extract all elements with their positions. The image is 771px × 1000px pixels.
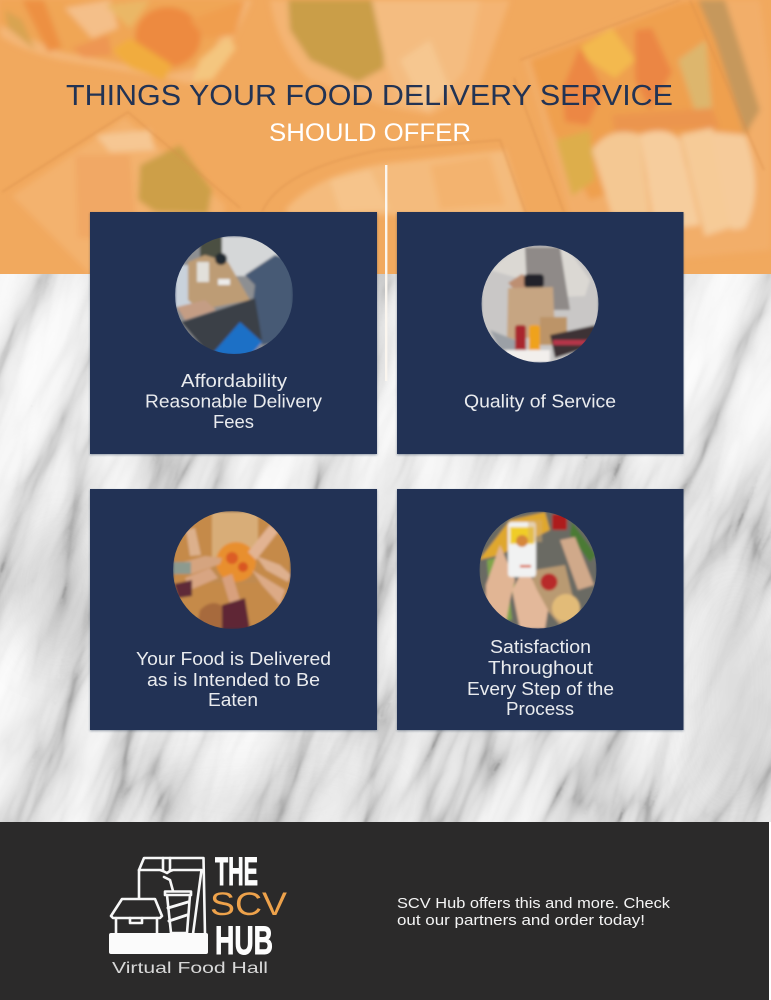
- card text: Affordability: [181, 371, 287, 391]
- panel: affordability card: [90, 212, 377, 454]
- photo: courier handing over paper bag: [175, 236, 293, 356]
- wordmark: Hub: HUB: [215, 919, 273, 963]
- card text: [145, 371, 322, 432]
- panel: footer: [0, 822, 769, 1000]
- panel: quality of service card: [397, 212, 684, 454]
- panel: satisfaction card: [397, 489, 684, 730]
- logo: The SCV Hub Virtual Food Hall: [109, 850, 288, 977]
- footer message: out our partners and order today!: [397, 912, 645, 929]
- tagline: Virtual Food Hall: [112, 960, 268, 977]
- photo: person packing paper bag: [481, 245, 599, 363]
- card text: as is Intended to Be: [147, 670, 320, 690]
- wordmark: SCV: SCV: [210, 886, 288, 922]
- footer message: SCV Hub offers this and more. Check: [397, 895, 671, 912]
- card text: Process: [506, 699, 574, 719]
- card text: Your Food is Delivered: [136, 649, 331, 669]
- photo: ordering food on a phone: [479, 511, 597, 629]
- card text: [467, 637, 614, 719]
- subtitle: SHOULD OFFER: [269, 119, 471, 147]
- icon: tray base: [109, 933, 208, 954]
- wordmark: The: THE: [215, 850, 258, 894]
- title: THINGS YOUR FOOD DELIVERY SERVICE: [66, 80, 673, 112]
- icon: takeout bag, box and cup: [111, 858, 205, 934]
- card text: Every Step of the: [467, 679, 614, 699]
- footer message: [397, 895, 671, 929]
- card text: Satisfaction: [490, 637, 591, 657]
- card text: Fees: [213, 412, 254, 432]
- photo: friends sharing pizza: [173, 511, 291, 629]
- card text: Quality of Service: [464, 392, 616, 412]
- card text: Throughout: [488, 658, 593, 678]
- panel: food delivered as intended card: [90, 489, 377, 730]
- panel: marble background: [0, 240, 771, 822]
- card text: [136, 649, 331, 710]
- panel: orange food photo header background: [0, 0, 771, 274]
- card text: Eaten: [208, 690, 258, 710]
- card text: Reasonable Delivery: [145, 392, 322, 412]
- divider line: [385, 165, 387, 381]
